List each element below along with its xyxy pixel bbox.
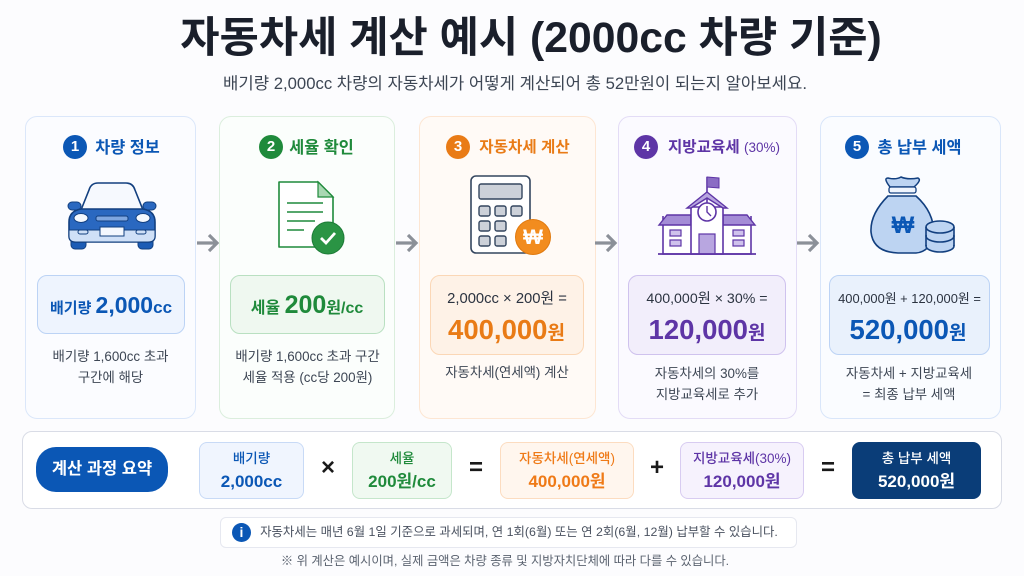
- summary box: education tax: 지방교육세(30%): [693, 451, 791, 466]
- step 1 description: 배기량 1,600cc 초과: [53, 349, 168, 364]
- step 1 number: [63, 135, 87, 159]
- summary box: tax rate: [352, 442, 452, 499]
- step 4 description: 지방교육세로 추가: [656, 386, 758, 402]
- arrow 2: [396, 234, 418, 252]
- summary box: tax rate: 세율: [390, 451, 414, 466]
- icon: money bag with coins: [870, 176, 955, 254]
- panel: step 4 education tax: [618, 116, 797, 419]
- step 4 heading: 지방교육세 (30%): [668, 139, 780, 156]
- education tax formula: 400,000원 × 30% =: [646, 291, 768, 307]
- operator: equals: =: [821, 454, 835, 481]
- summary label pill: [36, 447, 168, 492]
- panel: step 2 tax rate: [219, 116, 395, 419]
- step 2 heading: 세율 확인: [289, 139, 354, 157]
- summary box: displacement: 2,000cc: [221, 472, 282, 491]
- step 4 number: [634, 135, 658, 159]
- operator: times: ×: [321, 454, 335, 481]
- step 3 heading: 자동차세 계산: [479, 139, 570, 156]
- tax formula: 2,000cc × 200원 =: [447, 291, 567, 307]
- summary box: tax rate: 200원/cc: [368, 472, 436, 491]
- step 5 number: [845, 135, 869, 159]
- icon: calculator with won coin: ₩: [523, 226, 543, 249]
- step 3 description: 자동차세(연세액) 계산: [445, 365, 569, 380]
- summary box: annual tax: 자동차세(연세액): [519, 451, 615, 466]
- icon: money bag with coins: ₩: [892, 212, 915, 239]
- icon: school building: [658, 176, 756, 255]
- arrow 1: [197, 234, 219, 252]
- footnote: ※ 위 계산은 예시이며, 실제 금액은 차량 종류 및 지방자치단체에 따라 다를 수 있습니다.: [281, 554, 729, 568]
- icon: document with check: [278, 180, 344, 254]
- summary box: education tax: 120,000원: [703, 472, 781, 491]
- panel: step 3 tax calculation: [419, 116, 596, 419]
- step 5 description: [846, 366, 972, 402]
- step 5 description: = 최종 납부 세액: [863, 386, 955, 402]
- value box: total: [829, 275, 990, 355]
- arrow 4: [797, 234, 820, 252]
- step 3 number: [446, 135, 470, 159]
- step 5 number: 5: [853, 138, 861, 155]
- step 1 description: 구간에 해당: [78, 370, 143, 384]
- step 1 heading: 차량 정보: [95, 139, 160, 157]
- icon: info: i: [240, 524, 243, 540]
- step 2 number: 2: [267, 138, 275, 155]
- arrow 3: [595, 234, 618, 252]
- summary box: education tax: [680, 442, 804, 499]
- step 4 description: 자동차세의 30%를: [655, 366, 759, 381]
- value box: displacement: [37, 275, 185, 334]
- step 2 number: [259, 135, 283, 159]
- summary box: total: [852, 442, 981, 499]
- displacement value: 배기량 2,000cc: [50, 292, 172, 318]
- tax amount: 400,000원: [448, 314, 565, 345]
- panel: step 1 vehicle info: [25, 116, 196, 419]
- summary box: annual tax: [500, 442, 634, 499]
- title: 자동차세 계산 예시 (2000cc 차량 기준): [180, 14, 882, 62]
- step 3 number: 3: [454, 138, 462, 155]
- icon: info: [232, 523, 251, 542]
- operator: equals: =: [469, 454, 483, 481]
- summary box: total: 520,000원: [878, 472, 955, 491]
- icon: car: [68, 182, 156, 250]
- summary label pill: 계산 과정 요약: [52, 460, 152, 478]
- step 2 description: 배기량 1,600cc 초과 구간: [235, 349, 380, 364]
- summary box: total: 총 납부 세액: [882, 451, 951, 466]
- summary box: displacement: 배기량: [233, 451, 270, 466]
- step 5 description: 자동차세 + 지방교육세: [846, 366, 972, 381]
- value box: tax rate: [230, 275, 385, 334]
- step 5 heading: 총 납부 세액: [878, 139, 961, 157]
- summary box: annual tax: 400,000원: [528, 472, 606, 491]
- total amount: 520,000원: [850, 314, 966, 345]
- step 2 description: [235, 349, 380, 385]
- icon: calculator with won coin: [470, 175, 551, 255]
- step 4 description: [655, 366, 759, 402]
- step 1 number: 1: [71, 138, 79, 155]
- subtitle: 배기량 2,000cc 차량의 자동차세가 어떻게 계산되어 총 52만원이 되는지 알아보세요.: [223, 74, 807, 93]
- panel: calculation summary: [22, 431, 1002, 509]
- value box: tax amount: [430, 275, 584, 355]
- operator: plus: +: [650, 454, 664, 481]
- education tax amount: 120,000원: [649, 314, 765, 345]
- summary box: displacement: [199, 442, 304, 499]
- info note text: 자동차세는 매년 6월 1일 기준으로 과세되며, 연 1회(6월) 또는 연 2회(6월, 12월) 납부할 수 있습니다.: [260, 525, 778, 539]
- value box: education tax: [628, 275, 786, 355]
- step 2 description: 세율 적용 (cc당 200원): [243, 370, 372, 384]
- step 1 description: [53, 349, 168, 384]
- info note box: [220, 517, 797, 548]
- step 4 number: 4: [642, 138, 650, 155]
- total formula: 400,000원 + 120,000원 =: [838, 291, 981, 306]
- tax rate value: 세율 200원/cc: [251, 291, 363, 319]
- panel: step 5 total: [820, 116, 1001, 419]
